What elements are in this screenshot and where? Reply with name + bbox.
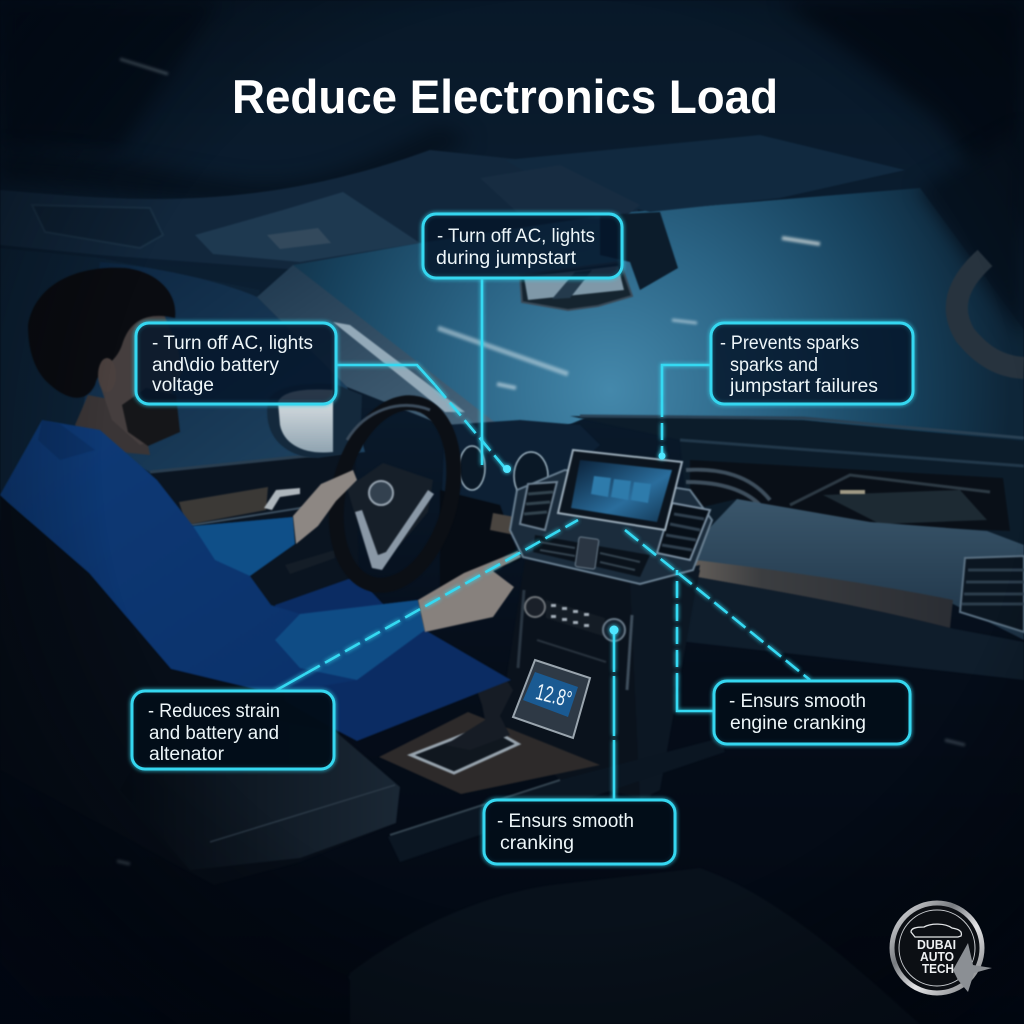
left vent xyxy=(520,482,557,530)
callout: reduces strain: altenator xyxy=(149,744,225,765)
A-pillar xyxy=(257,265,520,442)
wood tray xyxy=(379,712,600,794)
headliner xyxy=(0,150,640,270)
dark roof band xyxy=(0,125,470,205)
callout: battery voltage: voltage xyxy=(152,375,214,396)
streaks xyxy=(117,59,968,1012)
logo: Dubai Auto Tech: DUBAI xyxy=(917,938,956,952)
callout: turn off AC during jumpstart xyxy=(423,214,622,278)
dash top surface xyxy=(687,499,1024,640)
lower panel xyxy=(500,560,700,800)
top dark band xyxy=(570,416,1024,560)
dashboard xyxy=(440,416,1024,680)
door panel xyxy=(150,450,360,620)
connector lines xyxy=(275,278,810,800)
grab handle xyxy=(32,205,163,248)
callout: smooth engine cranking: - Ensurs smooth xyxy=(729,691,866,712)
windshield xyxy=(293,188,1024,445)
engine bay xyxy=(690,460,1010,531)
logo: Dubai Auto Tech: AUTO xyxy=(920,950,954,964)
hub xyxy=(347,463,433,568)
driver seat xyxy=(0,495,400,885)
left sun visor xyxy=(195,192,420,262)
wood trim xyxy=(680,559,953,628)
side window xyxy=(80,262,365,472)
knobs xyxy=(525,597,545,617)
callout: prevents sparks: - Prevents sparks xyxy=(720,333,859,354)
steering wheel xyxy=(318,390,472,598)
touch screen xyxy=(558,450,682,530)
cluster hood xyxy=(440,420,600,560)
callout: reduces strain xyxy=(132,691,334,769)
logo: Dubai Auto Tech: TECH xyxy=(922,962,954,976)
callout: smooth cranking xyxy=(484,800,675,864)
right vent xyxy=(657,503,710,560)
gear shifter xyxy=(445,678,513,750)
callout: reduces strain: and battery and xyxy=(149,723,279,744)
voltage meter device: 12.8° xyxy=(533,678,575,712)
face xyxy=(100,305,182,445)
lower dash xyxy=(670,574,1024,680)
callout: reduces strain: - Reduces strain xyxy=(148,701,280,722)
callout: battery voltage xyxy=(136,323,336,404)
beard xyxy=(122,388,180,446)
ear xyxy=(98,358,116,392)
callout: smooth cranking: - Ensurs smooth xyxy=(497,811,634,832)
instrument cluster xyxy=(440,446,548,590)
side mirror xyxy=(267,384,362,458)
passenger seat xyxy=(350,868,920,1024)
callout: turn off AC during jumpstart: - Turn off AC, lights xyxy=(437,226,595,247)
callout: smooth engine cranking xyxy=(714,681,910,744)
front ledge xyxy=(388,738,725,862)
right roof edge xyxy=(920,130,1024,340)
callout: smooth engine cranking: engine cranking xyxy=(730,713,866,734)
hands xyxy=(293,470,521,632)
callout: battery voltage: and\dio battery xyxy=(152,355,280,376)
callout: battery voltage: - Turn off AC, lights xyxy=(152,333,313,354)
neck xyxy=(75,395,150,455)
center vent xyxy=(533,535,650,577)
callout: turn off AC during jumpstart: during jumpstart xyxy=(436,248,577,269)
title: Reduce Electronics Load xyxy=(232,70,778,123)
rear-view mirror xyxy=(520,212,678,310)
trousers xyxy=(275,576,511,741)
center console xyxy=(379,470,725,862)
voltage meter device xyxy=(513,660,590,738)
callout: prevents sparks: jumpstart failures xyxy=(729,376,878,397)
sleeves xyxy=(193,517,295,576)
callout: prevents sparks xyxy=(711,323,913,404)
roof corners shadow xyxy=(0,0,220,150)
callout: prevents sparks: sparks and xyxy=(730,355,818,376)
shirt xyxy=(0,420,425,694)
button strip xyxy=(546,600,605,636)
driver xyxy=(0,268,511,741)
logo: Dubai Auto Tech xyxy=(892,903,992,993)
interior rear pillar xyxy=(0,248,260,520)
grab strap xyxy=(957,258,1024,368)
hair xyxy=(28,268,175,398)
stack bezel xyxy=(510,470,712,584)
callout: smooth cranking: cranking xyxy=(500,833,574,854)
right air vent xyxy=(960,556,1024,632)
right sun visor and overhead console xyxy=(505,135,905,212)
shifter bezel xyxy=(411,726,518,773)
collar xyxy=(38,420,95,460)
